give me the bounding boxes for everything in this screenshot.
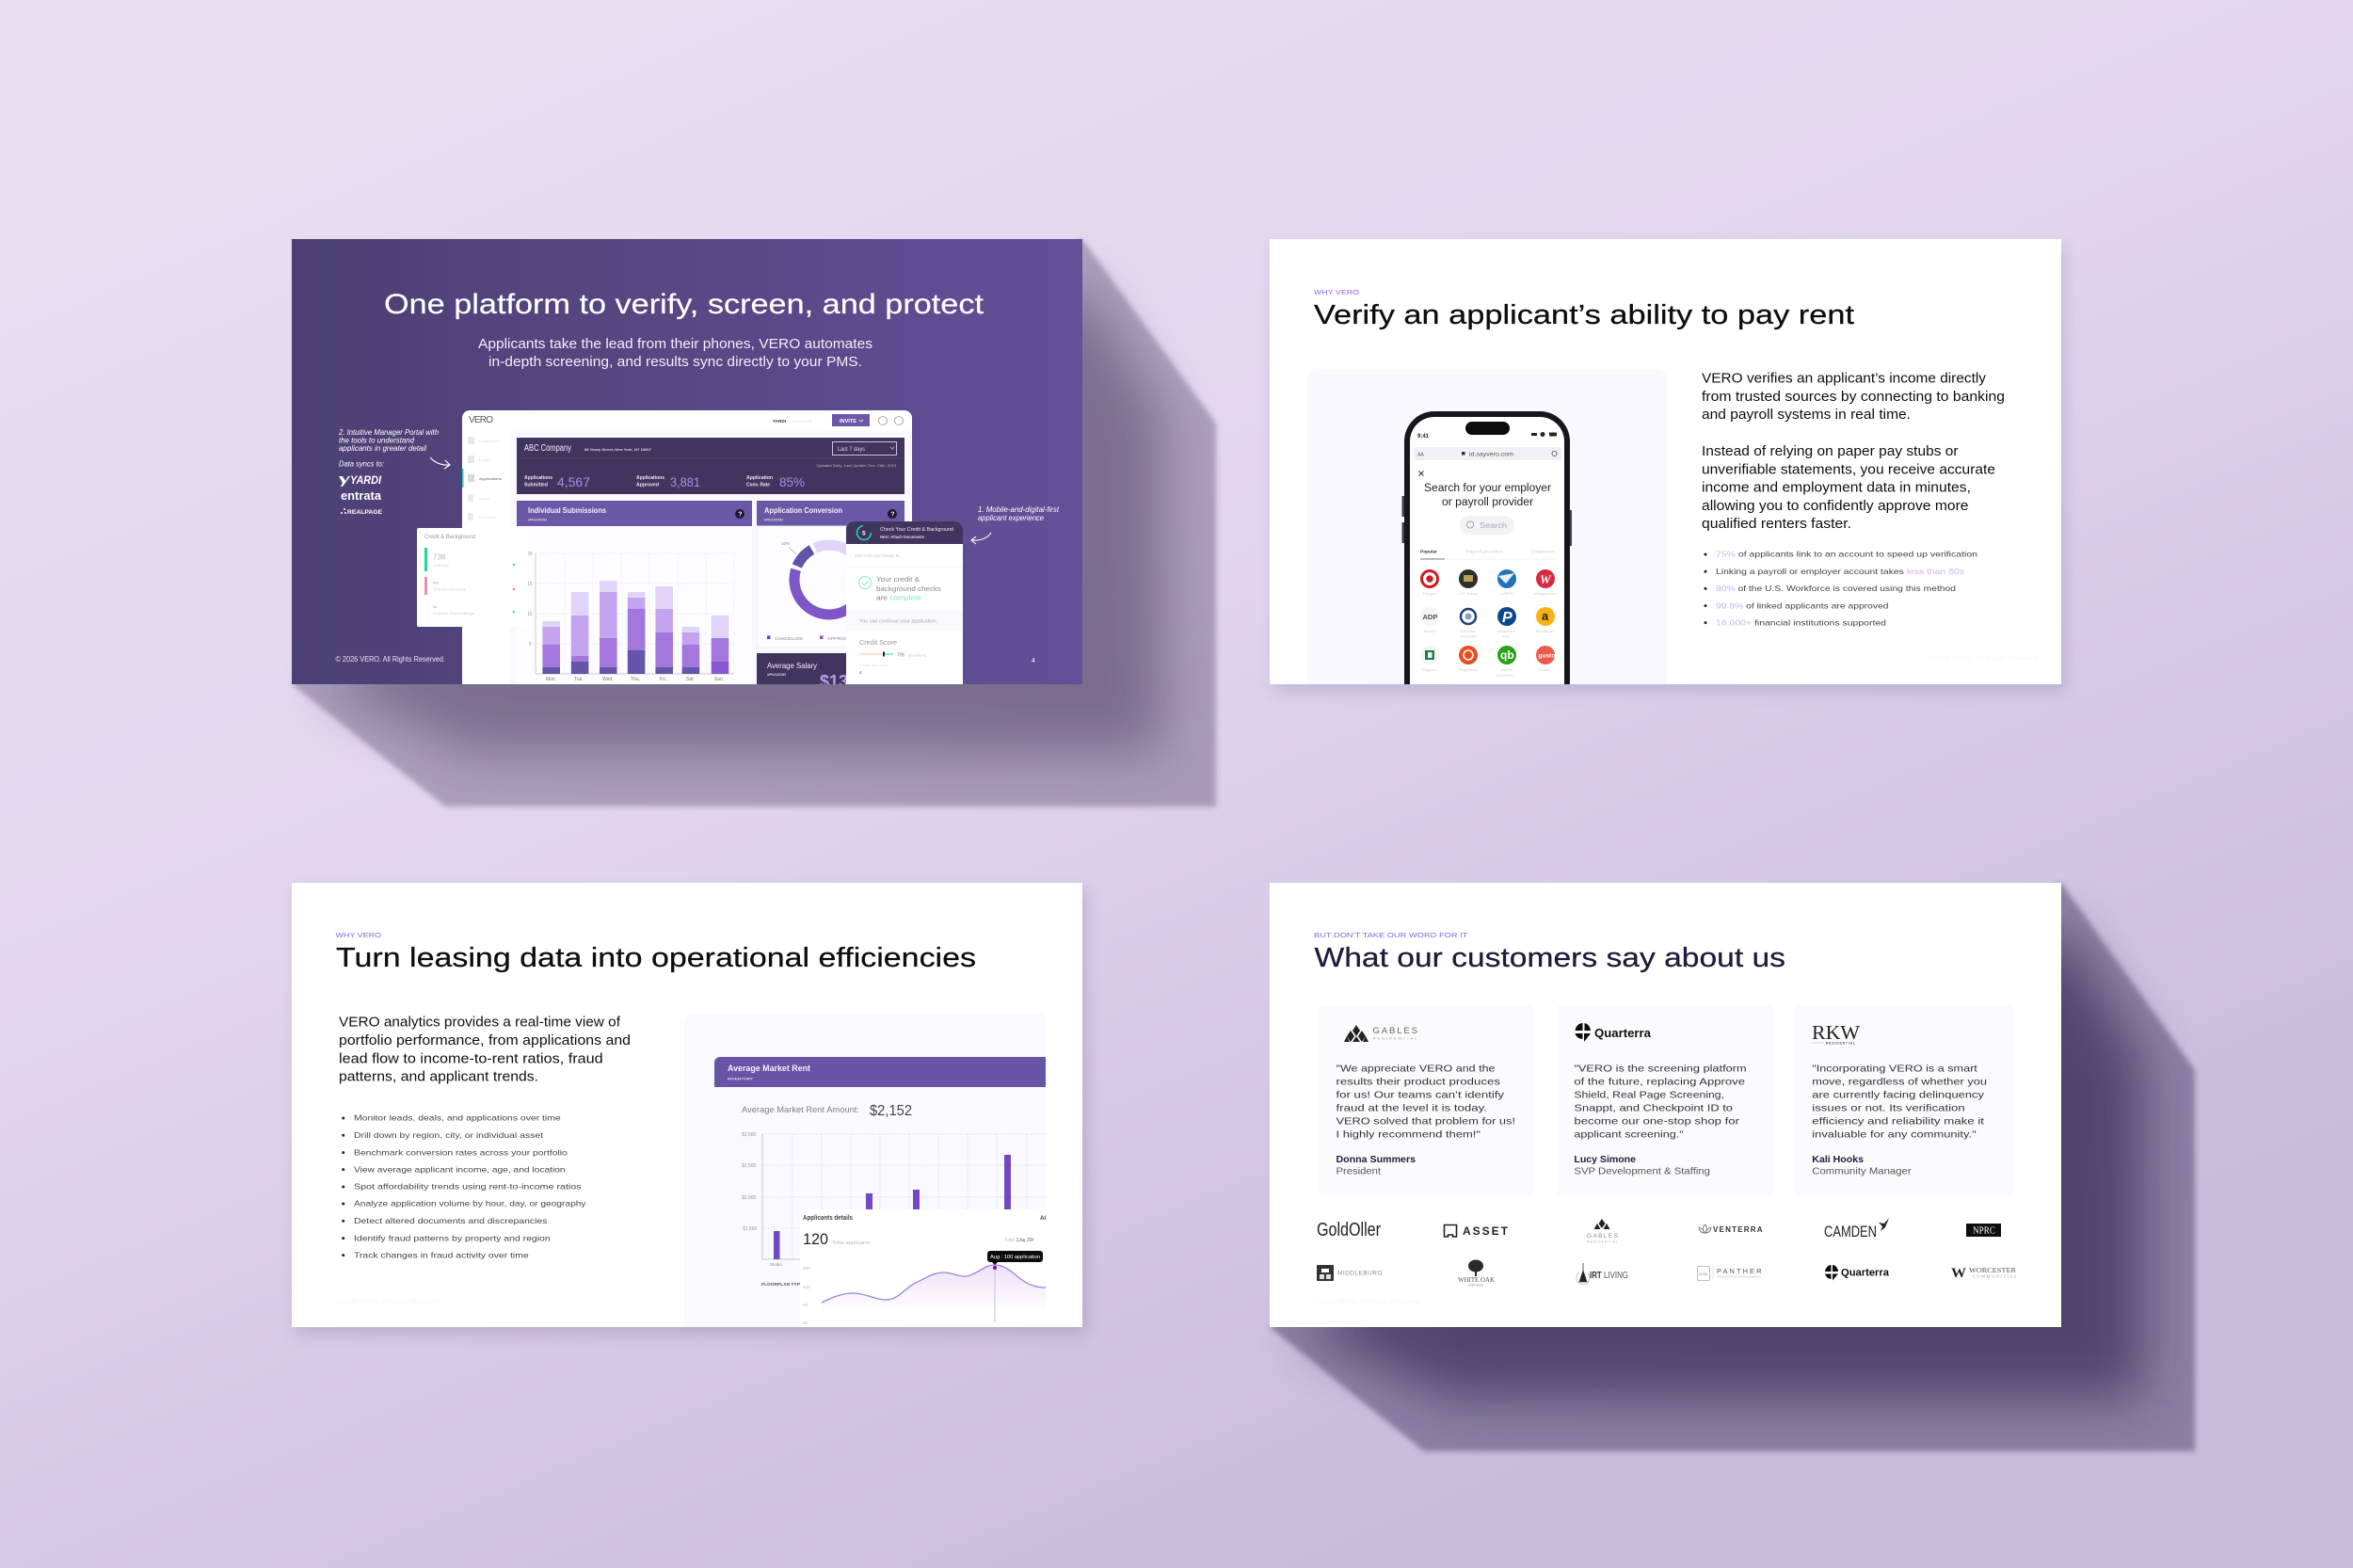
logo: venterra	[1699, 1224, 1763, 1234]
logo: quarterra	[1576, 1023, 1652, 1042]
dashboard top bar: INVITE	[840, 419, 856, 424]
attribution: Donna Summers	[1337, 1154, 1416, 1165]
mobile app card: Check Your Credit & Background	[880, 527, 953, 533]
bullet list: Monitor leads, deals, and applications over time	[354, 1113, 561, 1123]
annotation: manager portal	[338, 428, 440, 469]
url bar: AA	[1417, 452, 1424, 457]
company header	[517, 438, 904, 494]
quote: become our one-stop shop for	[1574, 1115, 1740, 1127]
url bar: id.sayvero.com	[1469, 452, 1513, 457]
icon: usps	[1497, 569, 1516, 596]
body copy: and payroll systems in real time.	[1702, 408, 1911, 423]
logo: camden: CAMDEN	[1824, 1223, 1877, 1240]
footer: copyright: © 2026 VERO. All Rights Reserved.	[335, 655, 445, 664]
icon: paycom	[1420, 646, 1439, 672]
logo: rkw: RKW	[1812, 1021, 1860, 1044]
line chart: 100	[803, 1285, 810, 1289]
quote: I highly recommend them!"	[1337, 1128, 1481, 1140]
bullet list	[1704, 550, 1977, 627]
bullet list: 75% of applicants link to an account to speed up verification	[1716, 550, 1977, 559]
logo: quarterra small: Quarterra	[1841, 1267, 1890, 1278]
logo: panther: REALESTATE MANAGEMENT	[1717, 1274, 1761, 1278]
quote: "Incorporating VERO is a smart	[1812, 1063, 1977, 1074]
annotation: mobile first: applicant experience	[978, 514, 1045, 522]
quote: invaluable for any community."	[1812, 1128, 1977, 1140]
attribution: SVP Development & Staffing	[1574, 1165, 1710, 1176]
icon: us army	[1459, 569, 1478, 596]
body copy: from trusted sources by connecting to banking	[1702, 390, 2005, 405]
shadow: slide 3	[296, 890, 1087, 1335]
dashboard top bar	[773, 414, 904, 426]
tabs: Employers	[1531, 550, 1556, 553]
logo: yardi: YARDI	[350, 473, 382, 487]
dashboard window	[462, 410, 912, 702]
logo: realpage: REALPAGE	[347, 510, 382, 516]
icon: adp: ADP	[1423, 613, 1437, 621]
icon: walgreens: W	[1540, 572, 1552, 586]
body copy: income and employment data in minutes,	[1702, 481, 1971, 496]
applicants details card: Posted: 11 Aug, 2024	[1005, 1238, 1033, 1243]
shadow: slide 1	[292, 239, 1216, 807]
logo: quarterra: Quarterra	[1594, 1027, 1652, 1040]
stacked bar chart: 5	[529, 642, 532, 648]
line chart: 30	[803, 1320, 808, 1325]
rent bar chart: $1,500	[743, 1226, 758, 1232]
tooltip: Aug : 100 application	[990, 1255, 1040, 1260]
attribution	[1337, 1154, 1416, 1176]
donut chart card	[757, 525, 847, 648]
average market rent header: Average Market Rent	[728, 1064, 811, 1074]
logo: gables stacked: RESIDENTIAL	[1587, 1240, 1618, 1244]
icon: amazon: Amazon	[1536, 629, 1554, 633]
logo: worcester	[1951, 1266, 2016, 1281]
logo: entrata: entrata	[341, 488, 382, 503]
stacked bar chart: Thu.	[631, 677, 640, 682]
dashboard sidebar: Applications	[479, 476, 502, 481]
icon: amazon: a	[1542, 609, 1549, 623]
quote: for us! Our teams can’t identify	[1337, 1089, 1505, 1100]
quote: issues or not. Its verification	[1812, 1102, 1965, 1113]
individual submissions header: APPLICATIONS	[528, 518, 547, 521]
body copy: portfolio performance, from applications and	[339, 1033, 631, 1048]
credit and background card: Credit & Background	[424, 535, 475, 540]
close icon	[1419, 471, 1423, 476]
logo: panther: DOM	[1699, 1272, 1707, 1276]
icon: social security: Social	[1460, 629, 1476, 633]
eyebrow: WHY VERO	[1314, 288, 1359, 296]
mobile app card: are complete	[876, 593, 921, 602]
company header: Submitted	[524, 482, 548, 488]
testimonial card: gables	[1317, 1005, 1535, 1195]
quote: applicant screening."	[1574, 1128, 1684, 1140]
dashboard mockup	[417, 410, 963, 702]
image card with phone	[1402, 411, 1572, 684]
bullet list: Detect altered documents and discrepancies	[354, 1216, 547, 1225]
icon: paychex: Flex	[1503, 634, 1511, 638]
dashboard top bar: YARDI	[773, 419, 786, 424]
attribution	[1812, 1154, 1912, 1176]
icon: gusto	[1536, 646, 1555, 672]
mobile app card	[846, 521, 963, 691]
logo: worcester: COMMUNITIES	[1973, 1274, 2016, 1278]
attribution: Kali Hooks	[1812, 1154, 1864, 1165]
stacked bar chart: Sat.	[686, 677, 695, 682]
logo: gables: RESIDENTIAL	[1372, 1035, 1417, 1041]
applicants details card: Total applicants	[832, 1240, 871, 1246]
company header: 4,567	[557, 474, 590, 489]
url bar	[1414, 447, 1561, 460]
phone heading	[1424, 483, 1551, 508]
icon: gusto: Gusto	[1539, 667, 1552, 672]
donut chart card: CANCELLED	[775, 636, 804, 641]
bullet list	[342, 1113, 586, 1259]
icon: paychex: Paychex	[1498, 629, 1515, 633]
logo: white oak	[1458, 1259, 1496, 1288]
check icon	[858, 576, 872, 589]
icon: paychex: P	[1502, 610, 1513, 626]
quote: are currently facing delinquency	[1812, 1089, 1985, 1100]
quote	[1574, 1063, 1747, 1140]
icon: us army: US Army	[1459, 591, 1478, 596]
annotation: manager portal: applicants in greater detail	[339, 444, 426, 453]
average salary card	[757, 653, 846, 684]
company header: Application	[746, 475, 773, 481]
application conversion header: APPLICATIONS	[764, 518, 783, 521]
dashboard sidebar: Leases	[479, 496, 490, 501]
credit and background card	[417, 528, 528, 627]
icon: walgreens	[1534, 569, 1557, 596]
logo: venterra: VENTERRA	[1713, 1225, 1763, 1234]
body copy: patterns, and applicant trends.	[339, 1070, 538, 1085]
body copy	[1702, 372, 2005, 532]
company header: 88 Vesey Street, New York, NY 10007	[584, 447, 652, 452]
annotation: manager portal: Data syncs to:	[339, 459, 384, 469]
icon: amazon	[1536, 607, 1555, 633]
logo: gables stacked: GABLES	[1587, 1233, 1619, 1240]
arrow: to manager portal	[430, 457, 450, 469]
stacked bar chart	[528, 552, 734, 680]
rent bar chart	[742, 1132, 1046, 1287]
icon: social security	[1460, 609, 1477, 638]
application conversion header: Application Conversion	[764, 506, 842, 515]
logo: worcester: WORCESTER	[1969, 1266, 2016, 1274]
icon: paylocity: Paylocity	[1459, 667, 1478, 672]
icon: quickbooks	[1497, 646, 1517, 678]
dashboard sidebar: Inventory	[479, 515, 496, 520]
subheading: Applicants take the lead from their phones, VERO automates	[478, 336, 872, 352]
company header: 3,881	[670, 474, 700, 489]
logo: white oak: WHITE OAK	[1458, 1275, 1496, 1284]
stacked bar chart: Wed.	[602, 677, 614, 682]
dashboard sidebar	[462, 437, 502, 520]
heading: Turn leasing data into operational efficiencies	[336, 943, 976, 973]
bullet list: Analyze application volume by hour, day, or geography	[354, 1199, 586, 1208]
company header: 85%	[779, 474, 805, 489]
annotation: mobile first	[978, 505, 1060, 522]
application conversion header: ?	[890, 512, 895, 518]
applicants details card: 120	[803, 1230, 828, 1248]
icon: usps: USPS	[1500, 591, 1513, 596]
icon: paychex	[1497, 607, 1516, 638]
mobile app card: 4	[859, 670, 862, 675]
mobile app card: Your credit &	[876, 575, 920, 584]
panel: one platform slide	[292, 239, 1082, 702]
icon: paylocity	[1459, 646, 1478, 672]
individual submissions header: ?	[738, 512, 743, 518]
arrow: to phone	[971, 533, 991, 544]
subheading	[478, 336, 872, 370]
bullet list: Track changes in fraud activity over time	[354, 1250, 529, 1259]
logo: panther: PANTHER	[1717, 1267, 1762, 1275]
dashboard top bar: connected	[787, 419, 812, 424]
rent amount: $2,152	[870, 1103, 912, 1119]
mobile app card: Credit accounts	[859, 664, 888, 667]
page number: 4	[1032, 658, 1035, 664]
annotation: manager portal: 2. Intuitive Manager Portal with	[338, 428, 440, 437]
icon: gusto: gusto	[1538, 653, 1555, 659]
quote: VERO solved that problem for us!	[1337, 1115, 1515, 1127]
quote: Shield, Real Page Screening,	[1574, 1089, 1724, 1100]
stacked bar chart: Mon.	[546, 677, 556, 682]
annotation: manager portal: the tools to understand	[339, 437, 415, 444]
credit and background card: Fail	[433, 582, 439, 585]
logo: middleburg: MIDDLEBURG	[1337, 1271, 1382, 1276]
logo: nprc: NPRC	[1973, 1225, 1995, 1237]
mobile app card: 795	[897, 653, 905, 659]
bullet list: Identify fraud patterns by property and region	[354, 1233, 551, 1242]
tooltip	[987, 1251, 1043, 1265]
progress ring: 5	[862, 531, 866, 536]
mobile app card: We indicate these N.	[855, 553, 901, 558]
logo: gables: GABLES	[1372, 1026, 1417, 1036]
line chart	[803, 1251, 1046, 1325]
logo: gables stacked	[1587, 1219, 1619, 1244]
line chart: 50	[803, 1303, 808, 1307]
quote	[1337, 1063, 1515, 1140]
logo: middleburg	[1317, 1265, 1382, 1281]
average market rent header: INVENTORY	[728, 1077, 753, 1080]
footer: faint: © 2026 VERO. All Rights Reserved.	[1314, 1297, 1421, 1305]
rent amount: Average Market Rent Amount:	[742, 1105, 859, 1115]
panel: leasing data	[292, 883, 1082, 1338]
company header: Conv. Rate	[746, 482, 770, 488]
application conversion header	[757, 501, 904, 526]
average salary card: Average Salary	[767, 662, 817, 670]
quote: of the future, replacing Approve	[1574, 1076, 1745, 1087]
body copy: VERO analytics provides a real-time view of	[339, 1016, 621, 1031]
bullet list: Benchmark conversion rates across your portfolio	[354, 1147, 568, 1157]
mobile app card: Credit Score	[859, 640, 897, 647]
icon: paycom: Paycom	[1422, 667, 1438, 672]
stacked bar chart: 10	[527, 612, 533, 617]
eyebrow: BUT DON’T TAKE OUR WORD FOR IT	[1314, 931, 1468, 939]
body copy: lead flow to income-to-rent ratios, fraud	[339, 1051, 603, 1066]
logo: rkw: RESIDENTIAL	[1826, 1041, 1856, 1045]
company header: Applications	[524, 475, 552, 481]
testimonial card: quarterra	[1556, 1005, 1775, 1195]
tabs: Payroll providers	[1466, 550, 1504, 553]
rent bar chart: $3,500	[742, 1132, 757, 1138]
quote	[1812, 1063, 1987, 1140]
individual submissions header	[517, 501, 752, 526]
icon: adp: MyADP	[1424, 629, 1436, 633]
mobile app card: (Excellent)	[908, 653, 926, 657]
stacked bar chart: 20	[527, 552, 533, 557]
stacked bar chart: Tue.	[574, 677, 584, 682]
dashboard brand: VERO	[469, 415, 493, 425]
tabs	[1420, 550, 1556, 559]
status bar	[1417, 432, 1557, 438]
credit and background card: Criminal Records	[433, 587, 466, 591]
logo: gables	[1344, 1025, 1417, 1042]
search pill	[1460, 516, 1514, 535]
body copy: VERO verifies an applicant’s income directly	[1702, 372, 1987, 387]
individual submissions header: Individual Submissions	[528, 506, 607, 515]
icon: target	[1420, 569, 1439, 596]
phone body	[1402, 411, 1572, 712]
rent bar chart: $2,500	[742, 1163, 757, 1169]
credit and background card: 738	[433, 553, 446, 561]
icon: target: Target	[1422, 591, 1437, 596]
bullet list: 16,000+ financial institutions supported	[1716, 617, 1886, 627]
company header: Applications	[636, 475, 664, 481]
phone heading: Search for your employer	[1424, 483, 1551, 494]
donut chart card: APPROV	[827, 636, 848, 641]
rent bar chart: Studio	[770, 1262, 782, 1267]
attribution: Lucy Simone	[1574, 1154, 1636, 1165]
icon: social security: Security	[1460, 634, 1477, 638]
quote: "We appreciate VERO and the	[1337, 1063, 1496, 1074]
dashboard sidebar: Dashboard	[479, 439, 500, 443]
shadow: slide 2	[1273, 247, 2065, 692]
credit and background card: Eviction Proceedings	[433, 611, 474, 616]
heading: one platform: One platform to verify, screen, and protect	[384, 289, 984, 320]
body copy	[339, 1016, 631, 1085]
subheading: in-depth screening, and results sync directly to your PMS.	[488, 354, 862, 370]
logo: asset: ASSET	[1463, 1224, 1509, 1238]
mobile app card: You can continue your application.	[859, 619, 937, 625]
phone heading: or payroll provider	[1442, 497, 1533, 508]
stacked bar chart: Fri.	[660, 677, 666, 682]
bullet list: Linking a payroll or employer account takes less than 60s	[1716, 567, 1964, 576]
stacked bar chart: Sun.	[714, 677, 724, 682]
stacked bar chart: 15	[527, 582, 533, 587]
mobile app card: Next: Attach Documents	[880, 535, 924, 539]
bullet list: 90% of the U.S. Workforce is covered using this method	[1716, 584, 1956, 593]
credit and background card: Credit Score	[433, 563, 450, 568]
logo: worcester: W	[1951, 1266, 1966, 1281]
icon: adp	[1420, 607, 1439, 633]
footer: faint: © 2026 VERO. All Rights Reserved.	[1928, 654, 2041, 663]
quote: fraud at the level it is today.	[1337, 1102, 1487, 1113]
quote: results their product produces	[1337, 1076, 1500, 1087]
average salary card: $13	[820, 672, 848, 691]
credit and background card: No	[433, 605, 438, 609]
image card: analytics	[684, 1014, 1064, 1338]
bullet list: 99.8% of linked applicants are approved	[1716, 600, 1889, 610]
quote: move, regardless of whether you	[1812, 1076, 1987, 1087]
heading: Verify an applicant’s ability to pay rent	[1314, 300, 1854, 330]
logo: yardi	[339, 473, 382, 487]
logo: nprc	[1966, 1224, 2001, 1237]
icon: quickbooks: Quicken...	[1497, 672, 1517, 678]
company header: ABC Company	[524, 443, 571, 454]
icon: quickbooks: qb	[1500, 648, 1514, 662]
mobile app card: background checks	[876, 584, 941, 593]
average market rent header	[714, 1057, 1054, 1087]
icon: walgreens: Walgreens	[1534, 591, 1557, 596]
bullet list: Spot affordability trends using rent-to-income ratios	[354, 1182, 582, 1192]
bullet list: Drill down by region, city, or individual asset	[354, 1130, 544, 1140]
status bar: 9:41	[1417, 434, 1430, 440]
body copy: allowing you to confidently approve more	[1702, 499, 1969, 514]
logo: irt living	[1577, 1263, 1628, 1285]
logo: quarterra small	[1825, 1265, 1890, 1280]
attribution: Community Manager	[1812, 1165, 1912, 1176]
progress ring	[856, 525, 872, 540]
body copy: Instead of relying on paper pay stubs or	[1702, 444, 1959, 459]
footer: faint: © 2026 VERO. All Rights Reserved.	[335, 1297, 442, 1305]
testimonial card: rkw	[1793, 1005, 2014, 1195]
logo: irt living: IRT LIVING	[1590, 1271, 1628, 1281]
quote: Snappt, and Checkpoint ID to	[1574, 1102, 1733, 1113]
search pill: Search	[1480, 521, 1507, 530]
annotation: mobile first: 1. Mobile-and-digital-first	[978, 505, 1060, 514]
quote: efficiency and reliability make it	[1812, 1115, 1984, 1127]
logo: realpage	[341, 508, 382, 516]
panel: verify ability to pay	[1270, 239, 2061, 712]
rent amount	[742, 1103, 912, 1119]
rent bar chart: $2,000	[742, 1195, 757, 1201]
eyebrow: WHY VERO	[335, 931, 381, 939]
body copy: unverifiable statements, you receive accurate	[1702, 462, 1995, 477]
shadow: slide 4	[1270, 883, 2195, 1451]
applicants details card: All	[1040, 1215, 1048, 1222]
donut chart card: 10%	[781, 541, 790, 546]
bullet list: View average applicant income, age, and location	[354, 1164, 566, 1174]
company header: Last 7 days	[838, 447, 865, 453]
applicants details card: Applicants details	[803, 1213, 853, 1222]
average salary card: APPLICATIONS	[767, 672, 786, 677]
logo: goldoller: GoldOller	[1317, 1220, 1381, 1240]
quote: "VERO is the screening platform	[1574, 1063, 1747, 1074]
attribution: President	[1337, 1165, 1381, 1176]
heading: What our customers say about us	[1314, 943, 1785, 973]
logo: panther	[1698, 1266, 1762, 1280]
logo: white oak: PARTNERS	[1468, 1284, 1483, 1288]
body copy: qualified renters faster.	[1702, 517, 1851, 532]
company header: Updated Daily. Last Update: Dec. 28th, 2021	[817, 463, 897, 468]
rent bar chart: FLOORPLAN TYP	[761, 1282, 800, 1287]
panel: customers	[1270, 883, 2061, 1327]
attribution	[1574, 1154, 1710, 1176]
dashboard sidebar: Leads	[479, 457, 489, 462]
line chart: 200	[803, 1266, 810, 1271]
icon: quickbooks: Intuit	[1501, 667, 1513, 672]
applicants details card	[800, 1209, 1064, 1332]
company header: Approved	[636, 482, 659, 488]
tabs: Popular	[1420, 550, 1437, 553]
